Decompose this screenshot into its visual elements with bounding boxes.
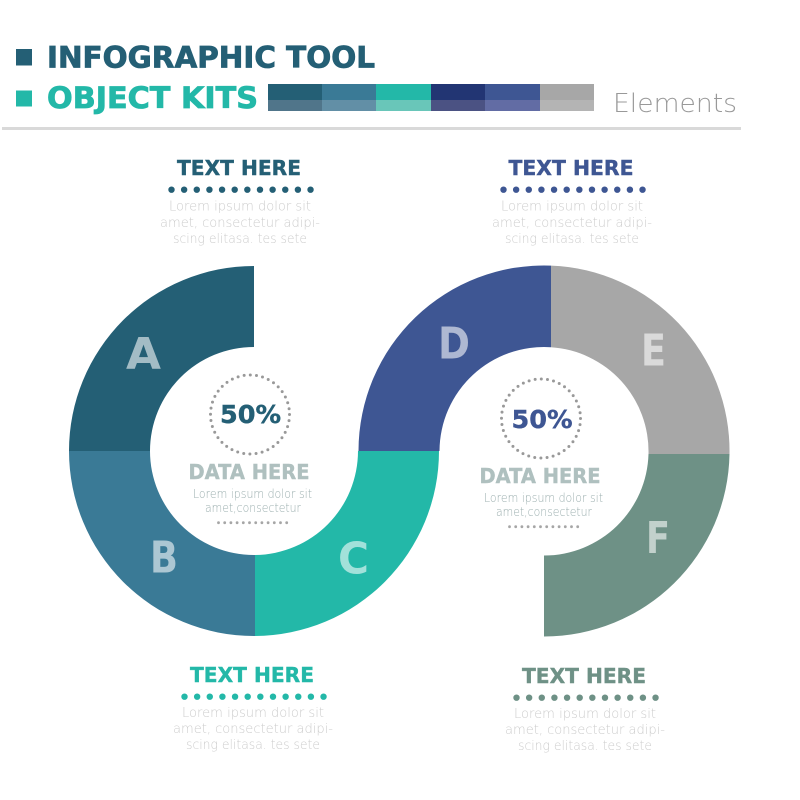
heading: TEXT HERE xyxy=(522,664,646,688)
letter E: E xyxy=(641,326,666,376)
body copy: Lorem ipsum dolor sit xyxy=(514,706,656,722)
body copy xyxy=(173,705,333,753)
centre data: right xyxy=(480,379,603,527)
data copy: amet,consectetur xyxy=(205,501,301,515)
body copy: amet, consectetur adipi- xyxy=(505,722,665,738)
body copy xyxy=(492,198,652,247)
heading: TEXT HERE xyxy=(508,156,634,180)
body copy: scing elitasa. tes sete xyxy=(518,738,652,754)
dotted ring xyxy=(502,379,580,458)
title: infographic tool: INFOGRAPHIC TOOL xyxy=(47,40,375,74)
dotted divider xyxy=(504,186,643,193)
segment E xyxy=(551,266,730,454)
segment F xyxy=(544,454,730,636)
text block: top right xyxy=(492,156,652,247)
label: elements: Elements xyxy=(613,89,737,119)
dotted divider xyxy=(510,525,578,528)
body copy: scing elitasa. tes sete xyxy=(505,231,639,247)
heading: TEXT HERE xyxy=(190,663,314,687)
centre data: left xyxy=(188,375,312,523)
letter B: B xyxy=(150,532,178,584)
body copy: Lorem ipsum dolor sit xyxy=(182,705,324,721)
text block: bottom right xyxy=(505,664,665,754)
dotted ring xyxy=(210,375,290,454)
body copy: amet, consectetur adipi- xyxy=(492,215,652,231)
data copy: Lorem ipsum dolor sit xyxy=(484,491,603,505)
data copy xyxy=(484,491,603,519)
heading: TEXT HERE xyxy=(177,156,301,180)
data copy xyxy=(193,487,312,515)
colour palette xyxy=(268,84,594,111)
data heading: DATA HERE xyxy=(188,460,310,484)
segment D xyxy=(358,265,551,451)
body copy xyxy=(160,198,320,247)
title: object kits: OBJECT KITS xyxy=(47,81,258,115)
letter D: D xyxy=(438,318,470,370)
percentage: 50% xyxy=(512,405,572,434)
letter A: A xyxy=(126,329,161,380)
bullet: infographic tool xyxy=(16,49,32,66)
body copy: amet, consectetur adipi- xyxy=(160,215,320,231)
dotted divider xyxy=(184,694,324,700)
header xyxy=(16,40,737,119)
dotted divider xyxy=(516,695,656,701)
segment C xyxy=(255,451,439,636)
ribbon chart xyxy=(69,265,730,636)
bullet: object kits xyxy=(16,90,32,106)
body copy: scing elitasa. tes sete xyxy=(173,231,307,247)
data copy: amet,consectetur xyxy=(496,505,592,519)
body copy: Lorem ipsum dolor sit xyxy=(169,198,311,214)
dotted divider xyxy=(218,521,287,524)
text block: top left xyxy=(160,156,320,247)
body copy: Lorem ipsum dolor sit xyxy=(501,198,643,214)
text block: bottom left xyxy=(173,663,333,753)
body copy: scing elitasa. tes sete xyxy=(186,737,320,753)
body copy xyxy=(505,706,665,754)
letter C: C xyxy=(338,534,369,584)
segment A xyxy=(69,266,254,451)
percentage: 50% xyxy=(220,400,281,429)
letter F: F xyxy=(646,513,670,564)
body copy: amet, consectetur adipi- xyxy=(173,721,333,737)
dotted divider xyxy=(172,186,311,193)
data copy: Lorem ipsum dolor sit xyxy=(193,487,312,501)
segment B xyxy=(69,451,255,636)
data heading: DATA HERE xyxy=(480,464,600,488)
